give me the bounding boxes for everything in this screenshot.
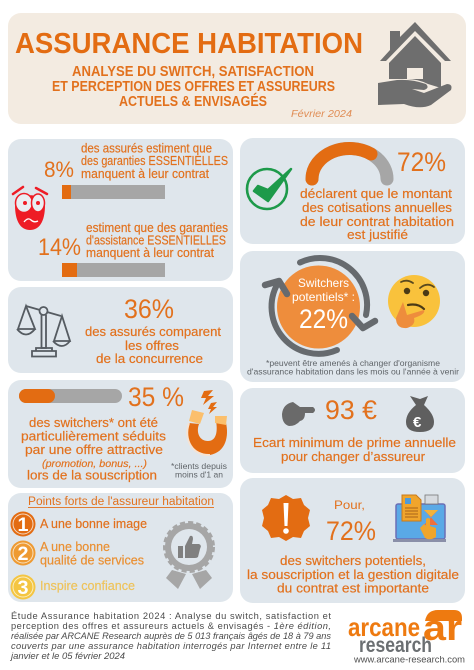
text block: study source [9,611,331,661]
panel: attractive offer [8,380,233,488]
panel: missing guarantees [8,139,233,281]
item 2: qualité de services [40,552,144,568]
stat: 8%: 8% [44,157,74,182]
chart: cycle circle [265,258,375,354]
item 1: A une bonne image [40,516,147,531]
footnote: definition [247,358,459,376]
panel: compare offers [8,287,233,373]
icon: money bag [406,396,434,432]
text block: premium gap [253,435,456,464]
heading: strengths: Points forts de l'assureur habitation [28,496,214,508]
icon: pointing hand [282,402,315,426]
item 3: 3 [18,578,28,599]
logo: arcane research: ar [423,607,462,648]
text block: study source: Étude Assurance habitation 2024 : Analyse du switch, satisfaction et [11,611,331,621]
text block: 14% description: estiment que des garanties [86,221,228,235]
text block: compare: de la concurrence [96,351,203,366]
icon: laptop with document [393,495,446,542]
icon: scales [17,306,70,356]
stat: 14%: 14% [38,234,81,261]
panel: digital subscription [240,478,465,603]
icon: magnet [187,390,227,455]
text block: 8% description: des garanties ESSENTIELLES [81,154,228,168]
text block: switchers: lors de la souscription [27,468,157,482]
icon: thinking emoji [388,275,440,328]
text block: study source: perception des offres et assureurs actuels & envisagés - 1ère édition, [11,621,331,631]
text block: study source: janvier et le 05 février 2024 [9,651,125,661]
text block: digital: du contrat est importante [277,580,429,596]
logo: arcane research: research [359,634,432,657]
text block: compare [85,324,221,366]
footnote: definition: d'assurance habitation dans les mois ou l'année à venir [247,366,459,376]
logo: arcane research [348,607,465,666]
text block: premium: des cotisations annuelles [302,200,453,215]
subtitle: ANALYSE DU SWITCH, SATISFACTION [72,64,314,80]
footnote: clients [171,461,227,480]
bar chart: 8% [62,185,165,199]
bar chart: 35% [19,389,122,403]
stat: 72%: 72% [326,516,376,546]
text block: premium gap: Ecart minimum de prime annuelle [253,435,456,450]
text block: premium gap: pour changer d’assureur [281,449,426,464]
item 3: Inspire confiance [40,578,135,593]
item 3 [10,574,135,600]
icon: worried face [13,187,47,230]
text block: premium: déclarent que le montant [300,186,452,201]
text: switchers potentiels: potentiels* : [292,290,355,304]
text block: compare: des assurés comparent [85,324,221,339]
stat: 35%: 35 % [128,382,184,412]
subtitle: ACTUELS & ENVISAGÉS [119,93,267,110]
stat: 36%: 36% [124,294,174,324]
text block: switchers [21,415,167,482]
item 1 [10,512,147,536]
footnote: clients: *clients depuis [171,461,227,471]
item 2: A une bonne [40,539,110,554]
item 2: 2 [18,544,28,565]
text block: premium [300,186,454,242]
icon: money bag: € [413,414,422,431]
text block: 14% description: d'assistance ESSENTIELLES [86,234,226,248]
text block: study source: couverts par une assurance habitation interrogés par Internet entre le 11 [11,641,331,651]
text: switchers potentiels: Switchers [298,276,349,290]
text: switchers potentiels [292,276,355,334]
icon: house in hand [378,22,452,107]
text block: 8% description: des assurés estiment que [81,142,212,156]
subtitle [52,64,335,110]
text block: 8% description: manquent à leur contrat [81,167,210,181]
panel: justified premium [240,138,465,244]
subtitle: ET PERCEPTION DES OFFRES ET ASSUREURS [52,79,335,95]
text block: switchers: des switchers* ont été [29,415,158,430]
text block: digital [247,553,459,596]
text block: study source: réalisée par ARCANE Research auprès de 5 013 français âgés de 18 à 79 ans [11,631,331,641]
logo: arcane research: arcane [348,612,420,642]
date: Février 2024 [291,108,352,120]
item 1: 1 [18,515,29,536]
text block: 8% description [81,142,228,181]
title: ASSURANCE HABITATION [15,28,363,60]
icon: thumbs-up rosette [165,523,213,589]
panel: minimum premium gap [240,388,465,473]
text block: 14% description [86,221,228,260]
text block: switchers: particulièrement séduits [21,428,167,444]
text block: switchers: par une offre attractive [25,442,163,457]
text block: digital: des switchers potentiels, [280,553,426,568]
text block: digital: la souscription et la gestion digitale [247,567,459,582]
footnote: definition: *peuvent être amenés à changer d'organisme [266,358,440,368]
text block: premium: est justifié [347,227,408,242]
gauge chart: 72% [312,148,387,179]
bar chart: 14% [62,263,165,277]
icon: exclamation badge [262,495,310,541]
icon: green check [247,169,291,209]
text block: 14% description: manquent à leur contrat [86,246,215,260]
item 2 [10,539,144,568]
panel: strengths [8,493,233,602]
panel: header [8,13,466,124]
text: switchers potentiels: 22% [299,304,348,334]
stat: 93 euros: 93 € [325,395,377,425]
logo: arcane research: www.arcane-research.com [353,654,465,666]
footnote: clients: moins d'1 an [175,470,223,480]
stat: 72%: 72% [397,147,446,177]
text block: switchers: (promotion, bonus, ...) [42,458,147,470]
text block: premium: de leur contrat habitation [300,214,454,229]
text block: compare: les offres [125,338,180,353]
panel: potential switchers [240,251,465,382]
text: pour: Pour, [334,498,365,512]
